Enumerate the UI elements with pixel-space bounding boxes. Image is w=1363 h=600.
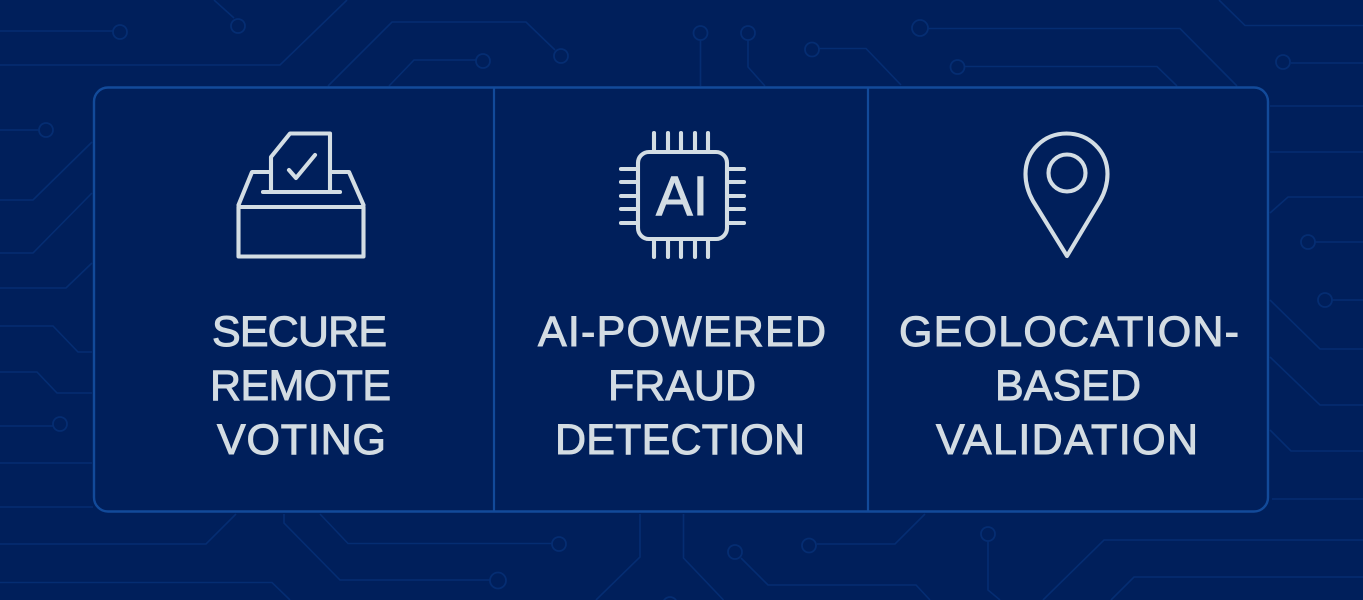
icon: ai chip: AI xyxy=(656,164,708,227)
icon: ballot box xyxy=(238,134,364,256)
heading: geolocation-based validation: BASED xyxy=(995,362,1141,410)
heading: ai-powered fraud detection: DETECTION xyxy=(555,416,805,464)
heading: secure remote voting: VOTING xyxy=(217,416,386,464)
heading: ai-powered fraud detection: AI-POWERED xyxy=(538,308,826,356)
panel: geolocation-based validation xyxy=(899,134,1239,464)
heading: ai-powered fraud detection: FRAUD xyxy=(608,362,756,410)
heading: geolocation-based validation: GEOLOCATION- xyxy=(899,308,1239,356)
heading: geolocation-based validation xyxy=(899,308,1239,464)
panel: ai-powered fraud detection xyxy=(538,133,826,464)
icon: location pin xyxy=(1026,134,1108,256)
main panel outline with three columns xyxy=(94,88,1268,512)
heading: secure remote voting: SECURE xyxy=(212,308,387,356)
heading: secure remote voting: REMOTE xyxy=(210,362,391,410)
heading: geolocation-based validation: VALIDATION xyxy=(936,416,1198,464)
heading: secure remote voting xyxy=(210,308,391,464)
heading: ai-powered fraud detection xyxy=(538,308,826,464)
panel: secure remote voting xyxy=(210,134,391,464)
icon: ai chip xyxy=(621,133,744,257)
